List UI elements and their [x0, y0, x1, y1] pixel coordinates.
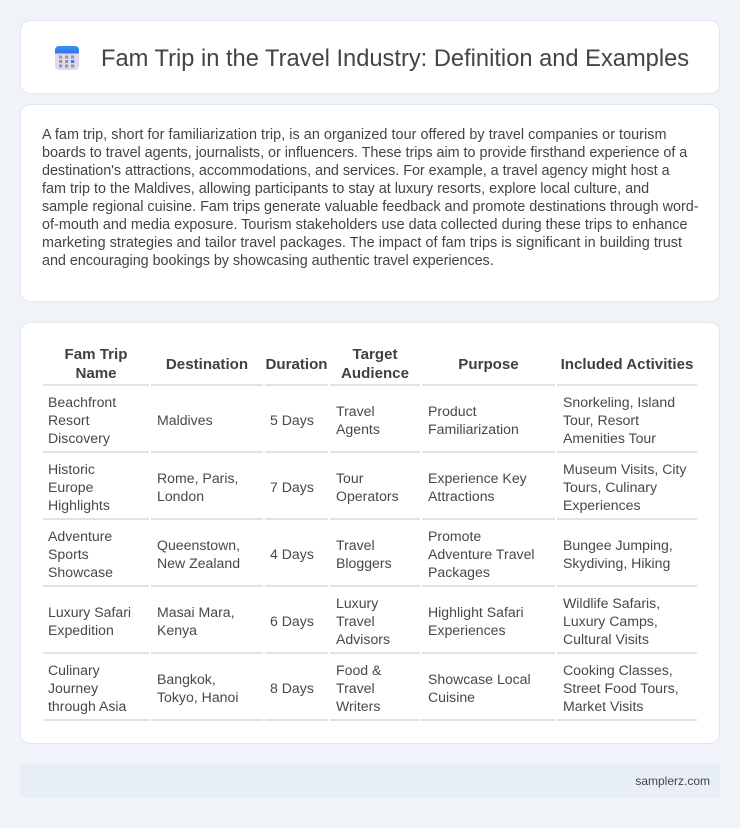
row: Luxury Safari: Luxury Safari	[48, 604, 131, 620]
row: Culinary Journey: Food &	[336, 662, 381, 678]
row: Historic Europe: Museum Visits, City	[563, 461, 686, 477]
row: Luxury Safari: Expedition	[48, 622, 114, 638]
table header: Included Activities	[561, 356, 693, 373]
table header: Destination	[166, 356, 248, 373]
text block: intro paragraph: sample regional cuisine. Fam trips generate valuable feedback and promote destinations through word-	[42, 199, 699, 215]
table header: Target	[352, 346, 398, 363]
text block: intro paragraph: destination's attractions, accommodations, and services. For example, a travel agency might host a	[42, 163, 670, 179]
icon: calendar	[55, 46, 79, 70]
row: Culinary Journey: Culinary	[48, 662, 100, 678]
row: Historic Europe: 7 Days	[270, 479, 314, 495]
header card	[20, 20, 720, 94]
row: Luxury Safari	[48, 595, 660, 647]
table header: Name	[75, 365, 117, 382]
row: Adventure Sports: Bungee Jumping,	[563, 537, 673, 553]
row: Beachfront: Product	[428, 403, 477, 419]
text block: intro paragraph	[42, 127, 699, 269]
text block: intro paragraph: marketing strategies and tailor travel packages. The impact of fam trips is significant in building trust	[42, 235, 682, 251]
row: Historic Europe: Europe	[48, 479, 93, 495]
text block: intro paragraph: fam trip to the Maldives, allowing participants to stay at luxury resorts, explore local culture, and	[42, 181, 649, 197]
table header: Purpose	[458, 356, 519, 373]
row: Culinary Journey: Writers	[336, 698, 380, 714]
row: Historic Europe: Tour	[336, 470, 363, 486]
row: Culinary Journey: through Asia	[48, 698, 126, 714]
row: Adventure Sports	[48, 528, 673, 580]
row: Adventure Sports: Sports	[48, 546, 89, 562]
text block: intro paragraph: boards to travel agents, journalists, or influencers. These trips aim to provide firsthand experience of a	[42, 145, 687, 161]
row: Beachfront: Travel	[336, 403, 375, 419]
row: Historic Europe: Tours, Culinary	[563, 479, 657, 495]
row: Adventure Sports: Travel	[336, 537, 375, 553]
row: Luxury Safari: Advisors	[336, 631, 390, 647]
row: Culinary Journey: Tokyo, Hanoi	[157, 689, 238, 705]
row: Beachfront: Agents	[336, 421, 380, 437]
row: Adventure Sports: Adventure Travel	[428, 546, 535, 562]
row: Culinary Journey: Street Food Tours,	[563, 680, 679, 696]
table header: Audience	[341, 365, 409, 382]
row: Historic Europe: Rome, Paris,	[157, 470, 238, 486]
row: Luxury Safari: Masai Mara,	[157, 604, 235, 620]
table header: Fam Trip	[65, 346, 127, 363]
row: Adventure Sports: New Zealand	[157, 555, 240, 571]
row: Historic Europe: Attractions	[428, 488, 495, 504]
row: Culinary Journey: Market Visits	[563, 698, 643, 714]
row: Historic Europe: Experiences	[563, 497, 641, 513]
row: Culinary Journey: Cuisine	[428, 689, 475, 705]
row: Beachfront: Tour, Resort	[563, 412, 639, 428]
text block: intro paragraph: of-mouth and media exposure. Tourism stakeholders use data collected during these trips to enhance	[42, 217, 687, 233]
row: Beachfront: Familiarization	[428, 421, 519, 437]
text block: intro paragraph: A fam trip, short for familiarization trip, is an organized tour offered by travel companies or tourism	[42, 127, 667, 143]
row: Adventure Sports: Adventure	[48, 528, 112, 544]
row: Adventure Sports: Promote	[428, 528, 481, 544]
row: Beachfront: Amenities Tour	[563, 430, 656, 446]
row: Historic Europe: Historic	[48, 461, 95, 477]
row: Historic Europe: Highlights	[48, 497, 110, 513]
footer bar	[20, 764, 720, 798]
row: Culinary Journey: Travel	[336, 680, 375, 696]
row: Culinary Journey: Journey	[48, 680, 98, 696]
row: Historic Europe: Operators	[336, 488, 399, 504]
row: Beachfront: Beachfront	[48, 394, 116, 410]
row: Adventure Sports: Skydiving, Hiking	[563, 555, 670, 571]
row: Luxury Safari: Wildlife Safaris,	[563, 595, 660, 611]
row: Beachfront	[48, 394, 675, 446]
row: Adventure Sports: Queenstown,	[157, 537, 240, 553]
row: Beachfront: 5 Days	[270, 412, 314, 428]
row: Beachfront: Resort	[48, 412, 90, 428]
row: Luxury Safari: Highlight Safari	[428, 604, 524, 620]
row: Beachfront: Maldives	[157, 412, 213, 428]
row: Adventure Sports: Packages	[428, 564, 490, 580]
table header: Duration	[265, 356, 328, 373]
row: Historic Europe	[48, 461, 686, 513]
row: Adventure Sports: Bloggers	[336, 555, 392, 571]
row: Luxury Safari: Kenya	[157, 622, 197, 638]
text block: intro paragraph: and encouraging bookings by showcasing authentic travel experiences.	[42, 253, 494, 269]
row: Luxury Safari: Experiences	[428, 622, 506, 638]
row: Luxury Safari: Luxury	[336, 595, 378, 611]
row: Culinary Journey: Showcase Local	[428, 671, 531, 687]
row: Luxury Safari: Travel	[336, 613, 375, 629]
row: Beachfront: Snorkeling, Island	[563, 394, 675, 410]
footer text: samplerz.com	[635, 774, 710, 788]
table	[43, 346, 697, 721]
row: Culinary Journey	[48, 662, 679, 714]
row: Beachfront: Discovery	[48, 430, 110, 446]
row: Adventure Sports: 4 Days	[270, 546, 314, 562]
row: Luxury Safari: 6 Days	[270, 613, 314, 629]
row: Historic Europe: London	[157, 488, 204, 504]
table header	[65, 346, 693, 382]
row: Luxury Safari: Luxury Camps,	[563, 613, 658, 629]
title: Fam Trip in the Travel Industry: Definition and Examples	[101, 46, 689, 72]
panel: intro paragraph	[20, 104, 720, 302]
row: Culinary Journey: Bangkok,	[157, 671, 216, 687]
row: Culinary Journey: Cooking Classes,	[563, 662, 673, 678]
row: Luxury Safari: Cultural Visits	[563, 631, 649, 647]
row: Historic Europe: Experience Key	[428, 470, 527, 486]
row: Adventure Sports: Showcase	[48, 564, 113, 580]
panel: table card	[20, 322, 720, 744]
row: Culinary Journey: 8 Days	[270, 680, 314, 696]
